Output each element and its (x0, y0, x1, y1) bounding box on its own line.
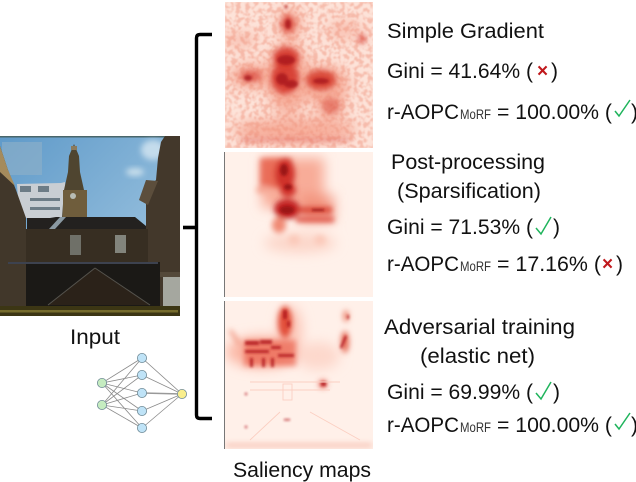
saliency map: adversarial training (225, 301, 373, 449)
input photo (0, 136, 180, 316)
gini 41.64: × (537, 61, 548, 82)
gini 41.64: Gini = 41.64% ( (387, 60, 533, 83)
text block: adversarial training: (elastic net) (420, 345, 535, 368)
r-aopc 100: r-AOPC (387, 414, 459, 437)
gini 69.99: ) (553, 381, 560, 404)
saliency map: simple gradient (222, 2, 373, 148)
r-aopc 17.16: MoRF (460, 258, 491, 274)
text block: simple gradient (387, 20, 636, 124)
r-aopc 100: = 100.00% ( (497, 101, 612, 124)
r-aopc 100 (387, 100, 636, 124)
map 3 left edge line (224, 301, 225, 449)
map 2 left edge line (224, 152, 225, 297)
gini 71.53: Gini = 71.53% ( (387, 216, 533, 239)
r-aopc 100: MoRF (460, 419, 491, 435)
label: saliency maps: Saliency maps (233, 459, 371, 482)
text block: post-processing (387, 151, 623, 276)
saliency map: post-processing (225, 152, 373, 297)
text block: simple gradient: Simple Gradient (387, 20, 544, 43)
gini 69.99: Gini = 69.99% ( (387, 381, 533, 404)
r-aopc 17.16: × (602, 254, 613, 275)
r-aopc 17.16 (387, 253, 623, 276)
r-aopc 100: MoRF (460, 106, 491, 122)
r-aopc 17.16: ) (616, 253, 623, 276)
neural network icon (97, 353, 187, 433)
gini 71.53: ) (553, 216, 560, 239)
text block: adversarial training (384, 316, 636, 437)
text block: post-processing: Post-processing (391, 151, 545, 174)
text block: post-processing: (Sparsification) (397, 180, 541, 203)
gini 41.64: ) (551, 60, 558, 83)
text block: adversarial training: Adversarial training (384, 316, 575, 339)
label: input: Input (70, 326, 120, 349)
r-aopc 17.16: = 17.16% ( (497, 253, 601, 276)
r-aopc 100: = 100.00% ( (497, 414, 612, 437)
bracket (183, 34, 212, 418)
r-aopc 100: r-AOPC (387, 101, 459, 124)
r-aopc 100 (387, 413, 636, 437)
r-aopc 17.16: r-AOPC (387, 253, 459, 276)
